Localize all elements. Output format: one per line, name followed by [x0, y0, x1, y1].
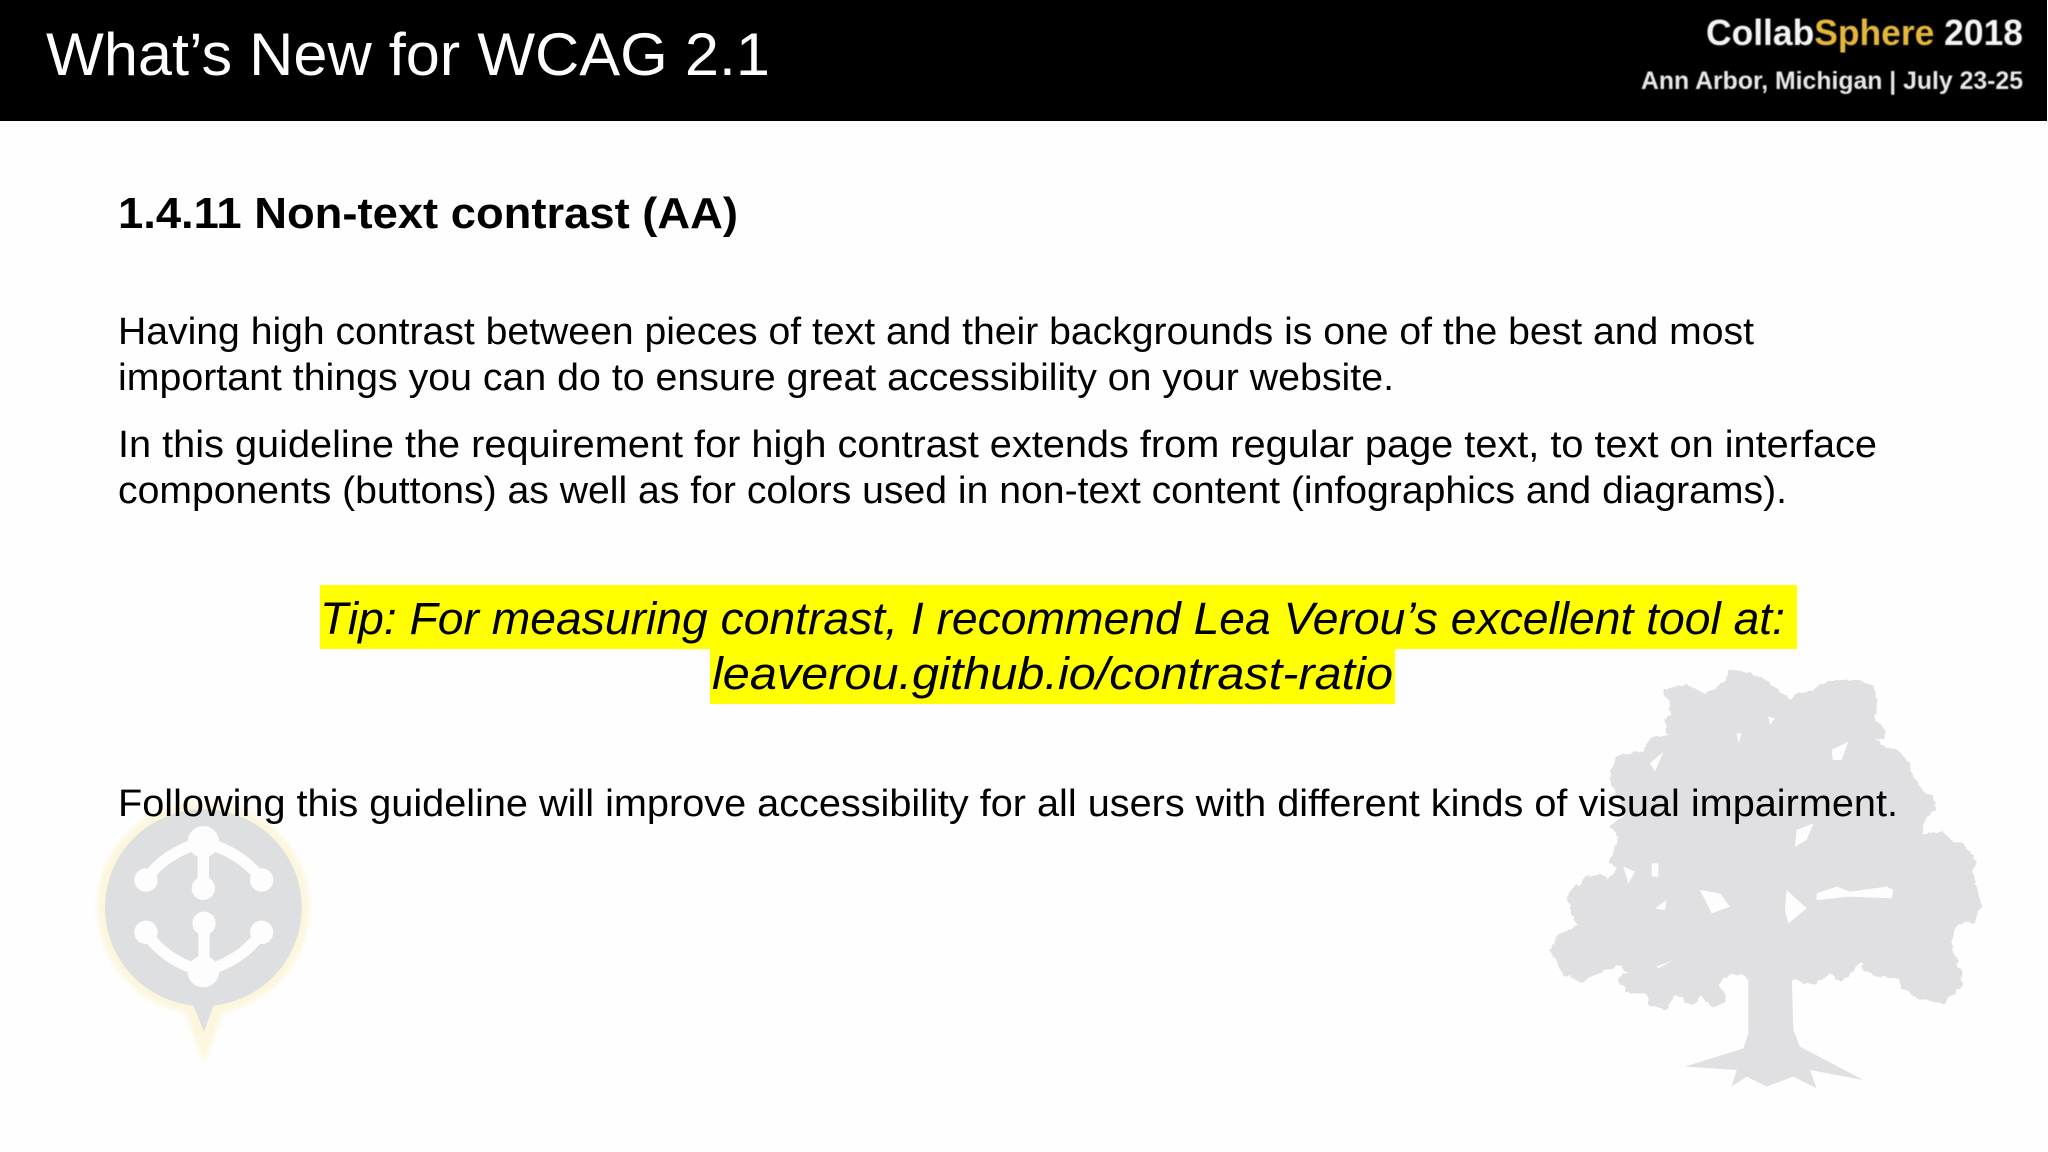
pin body	[105, 809, 302, 1032]
paragraph: guideline scope	[118, 424, 1877, 512]
watermark: network pin icon	[97, 802, 309, 1063]
section heading: 1.4.11 Non-text contrast (AA)	[118, 189, 738, 238]
paragraph: high contrast importance: important things you can do to ensure great accessibility on your website.	[118, 357, 1394, 399]
conference logo text	[1641, 12, 2023, 95]
tree trunk and roots	[1685, 973, 1863, 1088]
header bar	[0, 0, 2047, 121]
watermark: tree silhouette	[1552, 672, 1980, 1088]
icon glow	[97, 802, 309, 1063]
paragraph: guideline scope: In this guideline the requirement for high contrast extends from regular page text, to text on interface	[118, 424, 1877, 466]
slide title: What’s New for WCAG 2.1	[46, 21, 770, 88]
highlighted tip callout: Tip: For measuring contrast, I recommend Lea Verou’s excellent tool at:	[320, 593, 1785, 644]
tree canopy	[1552, 672, 1980, 1007]
gaps in the canopy	[1623, 717, 1893, 968]
conference logo text: CollabSphere 2018	[1706, 12, 2023, 53]
paragraph: benefit statement: Following this guideline will improve accessibility for all users with different kinds of visual impairment.	[118, 783, 1898, 825]
paragraph: high contrast importance	[118, 311, 1754, 399]
highlighted tip callout: leaverou.github.io/contrast-ratio	[712, 648, 1393, 699]
paragraph: guideline scope: components (buttons) as well as for colors used in non-text content (infographics and diagrams).	[118, 470, 1787, 512]
highlighted tip callout	[320, 585, 1797, 704]
paragraph: high contrast importance: Having high contrast between pieces of text and their backgrounds is one of the best and most	[118, 311, 1754, 353]
conference location and date: Ann Arbor, Michigan | July 23-25	[1641, 67, 2023, 95]
network symbol	[140, 832, 268, 982]
